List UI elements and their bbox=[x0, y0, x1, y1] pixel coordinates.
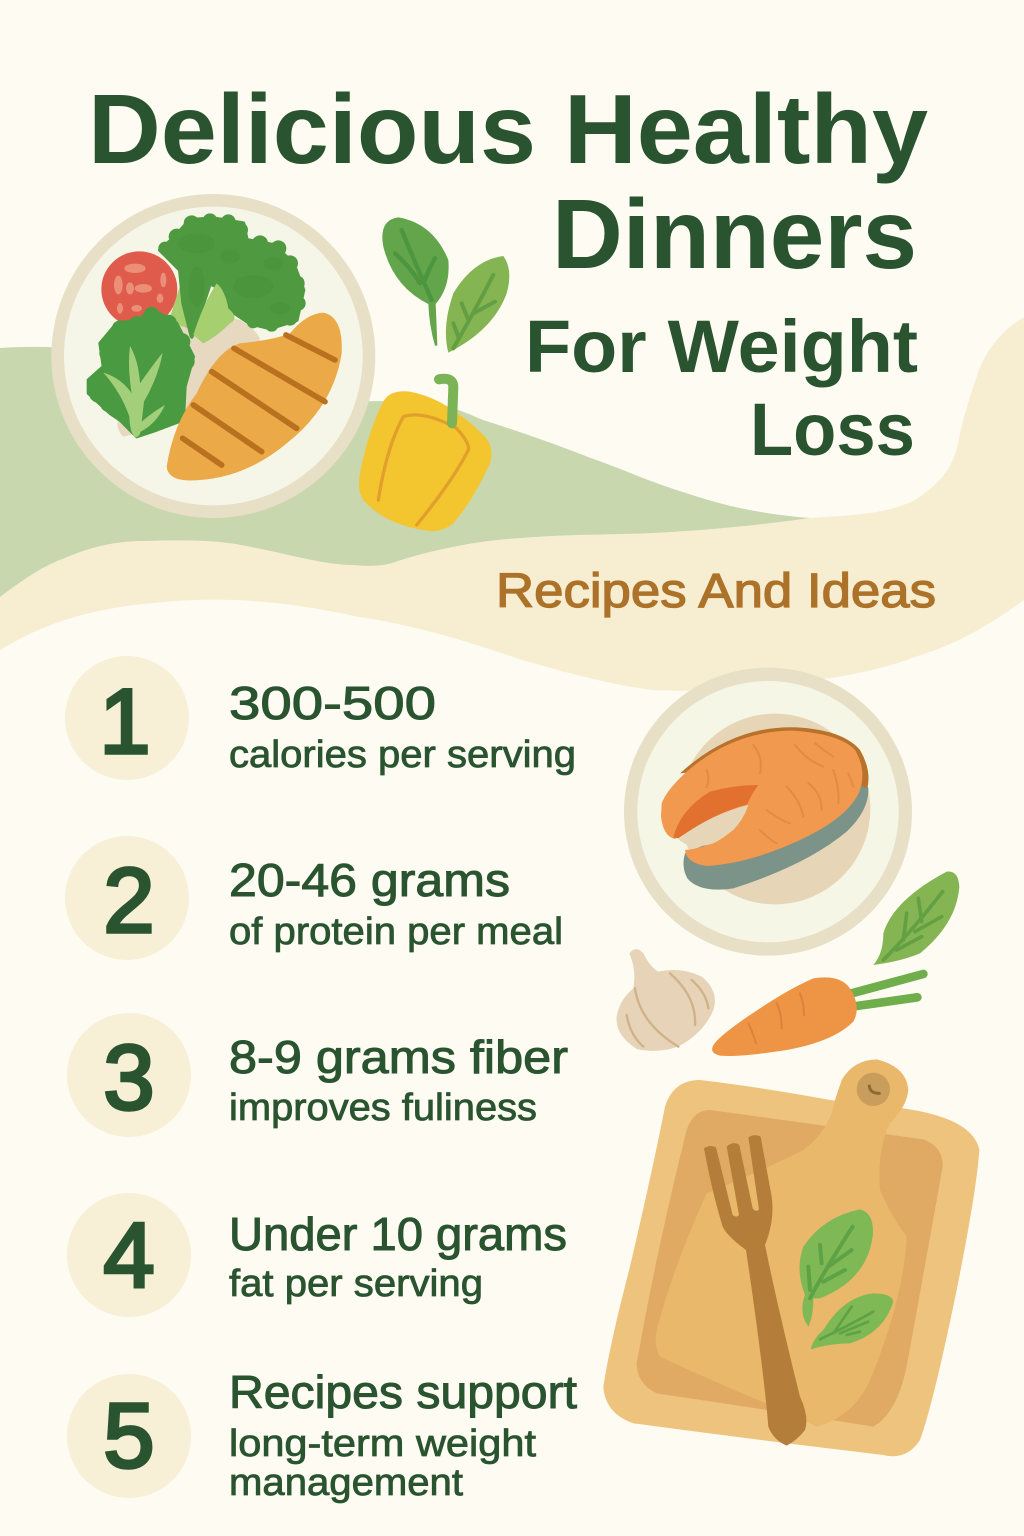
list item 4 bbox=[67, 1193, 567, 1317]
item 1 text: calories per serving bbox=[229, 734, 576, 776]
subtitle: Recipes And Ideas bbox=[496, 565, 936, 618]
list item 2 bbox=[65, 836, 563, 960]
item 3 text bbox=[229, 1031, 568, 1129]
icon: spinach leaf bbox=[382, 217, 449, 346]
number badge 3: 3 bbox=[103, 1027, 155, 1129]
icon: small leaf on board bbox=[811, 1293, 893, 1349]
number badge 2 bbox=[65, 836, 189, 960]
board outer bbox=[603, 1080, 979, 1456]
icon: grilled chicken bbox=[167, 313, 342, 481]
list item 3 bbox=[67, 1013, 568, 1137]
number badge 1: 1 bbox=[99, 671, 151, 773]
item 2 text bbox=[229, 854, 563, 953]
icon: salmon steak bbox=[661, 727, 869, 890]
number badge 1 bbox=[65, 656, 189, 780]
icon: yellow bell pepper bbox=[359, 379, 491, 531]
icon: lettuce bbox=[88, 307, 195, 437]
icon: tomato bbox=[101, 251, 177, 327]
salmon plate bbox=[624, 668, 912, 956]
icon: leaf on board bbox=[800, 1209, 873, 1327]
background: green wave bbox=[0, 347, 810, 610]
list item 5 bbox=[67, 1366, 577, 1504]
number badge 3 bbox=[67, 1013, 191, 1137]
title bbox=[88, 74, 928, 471]
title: Delicious Healthy bbox=[88, 74, 928, 184]
icon: carrot bbox=[712, 974, 923, 1056]
background: sand wave bbox=[0, 317, 1024, 691]
illustration: salmon plate, leaf, garlic and carrot bbox=[617, 668, 959, 1056]
item 5 text: Recipes support bbox=[229, 1366, 577, 1418]
item 1 text: 300-500 bbox=[229, 677, 436, 729]
number badge 4: 4 bbox=[103, 1205, 155, 1307]
number badge 5 bbox=[67, 1374, 191, 1498]
board inner recess bbox=[637, 1110, 943, 1427]
item 5 text: long-term weight bbox=[229, 1423, 536, 1465]
list item 1 bbox=[65, 656, 576, 780]
item 1 text bbox=[229, 677, 576, 776]
item 4 text: fat per serving bbox=[229, 1263, 483, 1305]
item 3 text: 8-9 grams fiber bbox=[229, 1031, 568, 1083]
item 5 text: management bbox=[229, 1462, 463, 1504]
title: Dinners bbox=[552, 179, 917, 289]
illustration: cutting board with fork and leaves bbox=[603, 1059, 979, 1456]
title: For Weight bbox=[525, 305, 918, 388]
icon: broccoli bbox=[158, 213, 306, 343]
item 5 text bbox=[229, 1366, 577, 1504]
item 2 text: of protein per meal bbox=[229, 911, 563, 953]
number badge 4 bbox=[67, 1193, 191, 1317]
item 3 text: improves fuliness bbox=[229, 1087, 537, 1129]
icon: spinach leaf bbox=[873, 872, 959, 965]
plate underlay bbox=[117, 317, 260, 437]
title: Loss bbox=[750, 388, 915, 471]
icon: spinach leaf small bbox=[446, 256, 509, 353]
icon: fork bbox=[704, 1135, 806, 1446]
item 4 text bbox=[229, 1208, 567, 1305]
illustration: dinner plate with chicken and greens bbox=[51, 194, 509, 531]
item 4 text: Under 10 grams bbox=[229, 1208, 567, 1260]
item 2 text: 20-46 grams bbox=[229, 854, 510, 906]
paddle with handle bbox=[656, 1059, 908, 1427]
icon: garlic bbox=[617, 949, 715, 1051]
number badge 5: 5 bbox=[103, 1385, 155, 1487]
number badge 2: 2 bbox=[103, 850, 155, 952]
